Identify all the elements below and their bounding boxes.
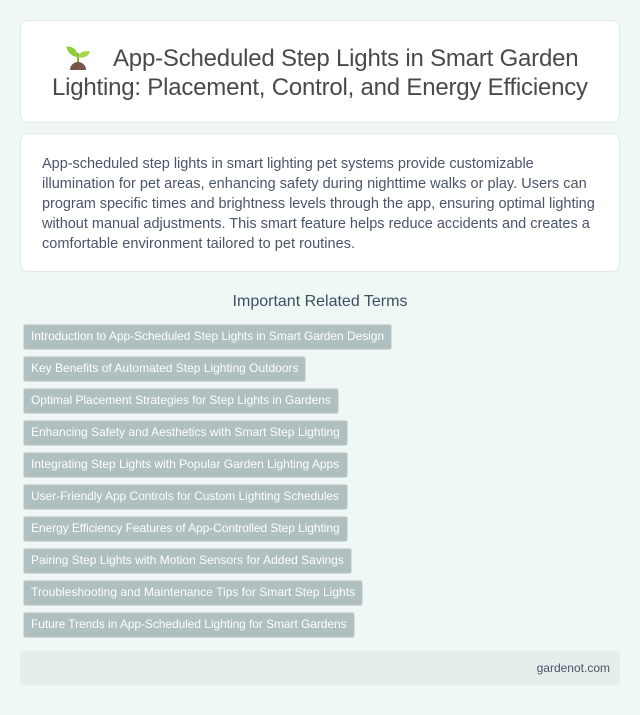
- term 9: [23, 580, 363, 606]
- title text: App-Scheduled Step Lights in Smart Garden: [113, 45, 578, 72]
- term 5: [23, 452, 348, 478]
- description text: [42, 156, 595, 252]
- term 3: Optimal Placement Strategies for Step Lights in Gardens: [31, 393, 331, 407]
- term 1: Introduction to App-Scheduled Step Lights in Smart Garden Design: [31, 329, 384, 343]
- term 6: [23, 484, 348, 510]
- term 4: Enhancing Safety and Aesthetics with Smart Step Lighting: [31, 425, 340, 439]
- term 8: [23, 548, 352, 574]
- term 7: Energy Efficiency Features of App-Controlled Step Lighting: [31, 521, 340, 535]
- term 9: Troubleshooting and Maintenance Tips for Smart Step Lights: [31, 585, 355, 599]
- description text: program specific times and brightness levels through the app, ensuring optimal lighting: [42, 196, 595, 212]
- term 8: Pairing Step Lights with Motion Sensors for Added Savings: [31, 553, 344, 567]
- term 10: Future Trends in App-Scheduled Lighting for Smart Gardens: [31, 617, 347, 631]
- term 2: [23, 356, 306, 382]
- section heading: Important Related Terms: [233, 293, 407, 310]
- title card: Lighting: Placement, Control, and Energy Efficiency: [52, 74, 588, 101]
- description text: without manual adjustments. This smart feature helps reduce accidents and creates a: [42, 216, 590, 232]
- related terms list: [23, 324, 392, 638]
- term 1: [23, 324, 392, 350]
- term 2: Key Benefits of Automated Step Lighting Outdoors: [31, 361, 299, 375]
- term 10: [23, 612, 355, 638]
- footer source text: gardenot.com: [537, 661, 610, 675]
- description text: illumination for pet areas, enhancing safety during nighttime walks or play. Users can: [42, 176, 587, 192]
- term 4: [23, 420, 348, 446]
- term 6: User-Friendly App Controls for Custom Lighting Schedules: [31, 489, 339, 503]
- description text: comfortable environment tailored to pet routines.: [42, 236, 355, 252]
- title card: [20, 20, 620, 123]
- icon: seedling: [66, 46, 90, 70]
- term 3: [23, 388, 339, 414]
- description card: [20, 133, 620, 272]
- description text: App-scheduled step lights in smart lighting pet systems provide customizable: [42, 156, 534, 172]
- footer bar: [20, 651, 620, 685]
- term 7: [23, 516, 348, 542]
- term 5: Integrating Step Lights with Popular Garden Lighting Apps: [31, 457, 339, 471]
